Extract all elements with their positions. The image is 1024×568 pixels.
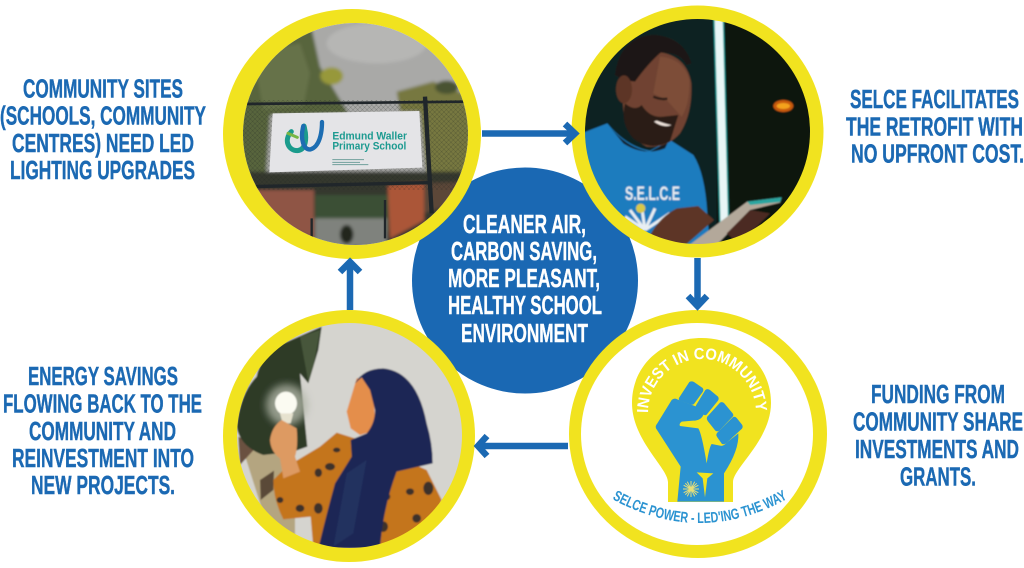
curved text: selce power: SELCE POWER - LED'ING THE WAY: [613, 490, 785, 523]
icon: sunburst and spark: [683, 472, 713, 497]
text: community sites: COMMUNITY SITES: [23, 74, 183, 104]
school sign: [269, 111, 422, 172]
arrow: school to SELCE: [482, 124, 575, 143]
text: energy savings: NEW PROJECTS.: [31, 470, 175, 500]
centre text: [448, 209, 602, 348]
text: energy savings: FLOWING BACK TO THE: [3, 388, 202, 418]
light strip: [714, 19, 729, 223]
shirt print: [625, 184, 680, 230]
centre text: ENVIRONMENT: [461, 318, 588, 348]
text: funding: GRANTS.: [900, 462, 976, 492]
glowing bulb: [266, 384, 307, 426]
curved text: invest in community: INVEST IN COMMUNITY: [637, 348, 768, 412]
text: energy savings: COMMUNITY AND: [29, 416, 176, 446]
head: [615, 35, 691, 147]
arrow: SELCE to funding: [688, 258, 707, 306]
orange wall light: [773, 100, 793, 112]
sign name: Primary School: [332, 140, 406, 152]
text: funding: [853, 379, 1023, 492]
arrow: savings to community sites: [340, 262, 360, 310]
icon: raised fist: [656, 381, 743, 502]
dress: [273, 433, 442, 548]
sign logo: [287, 122, 322, 151]
sign name: Edmund Waller: [332, 131, 408, 143]
text: energy savings: REINVESTMENT INTO: [12, 443, 194, 473]
centre text: MORE PLEASANT,: [448, 263, 600, 293]
tablet: [689, 197, 782, 245]
text: community sites: (SCHOOLS, COMMUNITY: [0, 100, 206, 130]
arm and hands: [650, 206, 714, 244]
centre text: CLEANER AIR,: [463, 209, 586, 239]
text: community sites: [0, 74, 206, 185]
text: energy savings: [3, 361, 202, 500]
bulb: [632, 338, 771, 502]
panel: invest in community logo circle: [569, 310, 827, 558]
text: community sites: CENTRES) NEED LED: [12, 128, 194, 158]
arrow: funding to savings: [478, 436, 568, 456]
panel: school photo circle: [223, 9, 481, 259]
centre text: CARBON SAVING,: [451, 236, 597, 266]
shirt print: S.E.L.C.E: [625, 184, 680, 205]
text: community sites: LIGHTING UPGRADES: [10, 155, 195, 185]
plant and box: [245, 450, 296, 534]
sign name: [332, 131, 408, 152]
text: energy savings: ENERGY SAVINGS: [28, 361, 178, 391]
t-shirt: [583, 123, 710, 247]
hand: [270, 420, 300, 478]
centre circle: outcome: [412, 168, 638, 394]
panel: SELCE person photo circle: [572, 6, 824, 258]
centre text: HEALTHY SCHOOL: [448, 290, 602, 320]
face: [347, 377, 376, 435]
hijab: [318, 368, 433, 548]
text: SELCE facilitates: [846, 84, 1024, 168]
panel: woman with light bulb photo circle: [223, 310, 475, 562]
